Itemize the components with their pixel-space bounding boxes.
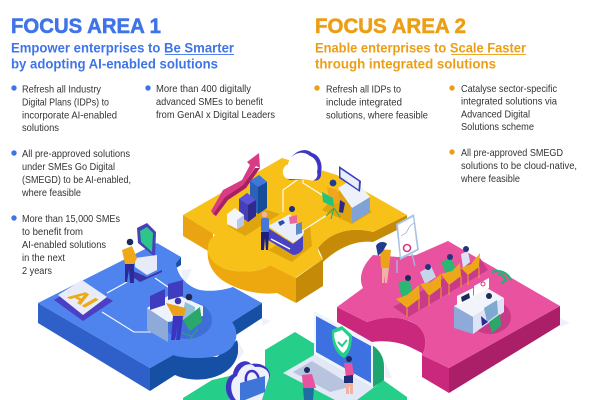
AI chip [54, 280, 113, 321]
subheading: focus area 2 [315, 40, 527, 72]
woman at laptop [344, 356, 354, 394]
icon: cloud lock [226, 361, 270, 400]
bullet: 15,000 SMEs: to benefit from [22, 227, 83, 238]
bullet: pre-approved solutions [11, 149, 131, 199]
man at laptop [302, 367, 316, 400]
bullet: cloud-native solutions: where feasible [460, 174, 520, 185]
bullet: refresh industry digital plans: incorporate AI-enabled [22, 110, 117, 122]
bullet: refresh industry digital plans: solutions [22, 123, 59, 134]
bullet: refresh industry digital plans: Digital Plans (IDPs) to [22, 98, 109, 108]
bullet: refresh industry digital plans [11, 84, 117, 134]
subheading: focus area 1: Empower enterprises to Be Smarter [11, 40, 235, 56]
panel: focus area 2 text [314, 14, 577, 185]
icon: wifi [492, 271, 511, 284]
desk with monitors [454, 278, 504, 334]
bar chart: isometric bars [227, 175, 267, 229]
puzzle piece: yellow with analytics, reception and desk [183, 150, 407, 303]
blue piece body [38, 243, 262, 391]
bullet: pre-approved solutions: under SMEs Go Digital [22, 162, 115, 173]
bullet: 400 digitally advanced SMEs: More than 400 digitally [156, 84, 252, 95]
bullet: 400 digitally advanced SMEs: from GenAI x Digital Leaders [156, 110, 275, 121]
bullet: catalyse sector-specific solutions: Solutions scheme [461, 122, 534, 133]
presenter [376, 242, 391, 283]
pale shadows [181, 269, 271, 326]
desk with analyst [322, 166, 370, 223]
bullet: 15,000 SMEs: 2 years [22, 266, 52, 277]
bullet: refresh IDPs: include integrated [326, 98, 402, 108]
audience on chairs [396, 246, 480, 317]
puzzle piece: pink with presentation [337, 214, 570, 393]
connector lines [102, 278, 168, 332]
audience member 3 [441, 254, 461, 295]
connector lines [283, 172, 327, 231]
green piece body [183, 332, 407, 400]
bullet: pre-approved solutions: (SMEGD) to be AI-enabled, [22, 175, 131, 186]
laptop [283, 311, 373, 400]
heading: focus area 1: FOCUS AREA 1 [11, 14, 161, 38]
puzzle piece: blue with AI chip and kiosk [38, 223, 271, 391]
subheading: focus area 2: Enable enterprises to Scale Faster [315, 40, 527, 56]
yellow piece body [183, 158, 407, 303]
person at kiosk [122, 239, 137, 283]
subheading: focus area 1 [11, 40, 235, 72]
pink piece body [337, 241, 560, 393]
bullet: 15,000 SMEs: AI-enabled solutions [22, 240, 106, 251]
audience member 2 [420, 264, 441, 306]
reception counter with staff [261, 206, 304, 255]
desk shadow [469, 300, 511, 334]
bullet: 400 digitally advanced SMEs [145, 84, 275, 121]
desk shadow [162, 301, 212, 339]
bullet: cloud-native solutions: All pre-approved SMEGD [461, 148, 563, 159]
icon: cloud [283, 150, 322, 181]
desk shadow [228, 190, 372, 262]
subheading: focus area 2: through integrated solutions [315, 56, 496, 72]
flip chart [396, 214, 419, 273]
bullet: catalyse sector-specific solutions: Advanced Digital [461, 110, 530, 120]
label: AI: AI [63, 287, 103, 310]
audience member 1 [396, 275, 420, 317]
pale shadow [560, 318, 570, 327]
bullet: catalyse sector-specific solutions: integrated solutions via [461, 96, 557, 108]
audience member 4 [461, 246, 480, 285]
bullet: refresh IDPs: Refresh all IDPs to [326, 84, 401, 96]
bullet: refresh IDPs [314, 84, 428, 122]
bullet: cloud-native solutions [449, 148, 577, 185]
panel: focus area 1 text [11, 14, 275, 277]
subheading: focus area 1: by adopting AI-enabled solutions [11, 56, 218, 72]
icon: shield [332, 326, 352, 358]
desk with two workers [147, 280, 203, 342]
icon: rising arrow [211, 153, 260, 216]
pale shadows [238, 340, 392, 378]
kiosk [133, 223, 162, 282]
bullet: cloud-native solutions: solutions to be cloud-native, [461, 161, 577, 172]
bullet: 400 digitally advanced SMEs: advanced SMEs to benefit [156, 97, 263, 108]
bullet: refresh IDPs: solutions, where feasible [326, 110, 428, 122]
puzzle piece: green with laptop and security [183, 311, 407, 400]
bullet: 15,000 SMEs: in the next [22, 253, 65, 264]
bullet: catalyse sector-specific solutions: Catalyse sector-specific [461, 84, 557, 95]
bullet: pre-approved solutions: where feasible [21, 188, 81, 199]
heading: focus area 2: FOCUS AREA 2 [315, 14, 466, 38]
bullet: 15,000 SMEs [11, 214, 120, 277]
bullet: 15,000 SMEs: More than 15,000 SMEs [22, 214, 120, 225]
bullet: catalyse sector-specific solutions [449, 84, 557, 133]
chair row shadow [393, 258, 488, 317]
bullet: refresh industry digital plans: Refresh all Industry [22, 84, 102, 96]
bullet: pre-approved solutions: All pre-approved solutions [22, 149, 130, 160]
